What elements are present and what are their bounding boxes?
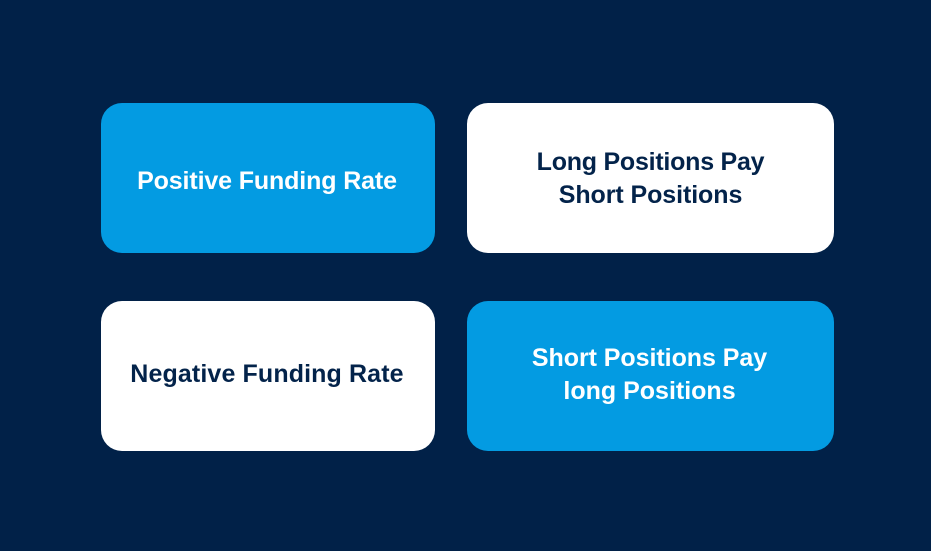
panel: long positions pay short positions <box>467 103 834 253</box>
panel: long positions pay short positions: Long Positions Pay <box>537 148 764 176</box>
panel: long positions pay short positions: Short Positions <box>559 181 742 209</box>
panel: negative funding rate <box>101 301 435 451</box>
panel: short positions pay long positions <box>467 301 834 451</box>
panel: negative funding rate: Negative Funding Rate <box>130 360 404 388</box>
panel: short positions pay long positions: long Positions <box>563 377 736 405</box>
panel: short positions pay long positions: Short Positions Pay <box>532 344 767 372</box>
panel: positive funding rate: Positive Funding Rate <box>137 166 397 194</box>
panel: positive funding rate <box>101 103 435 253</box>
